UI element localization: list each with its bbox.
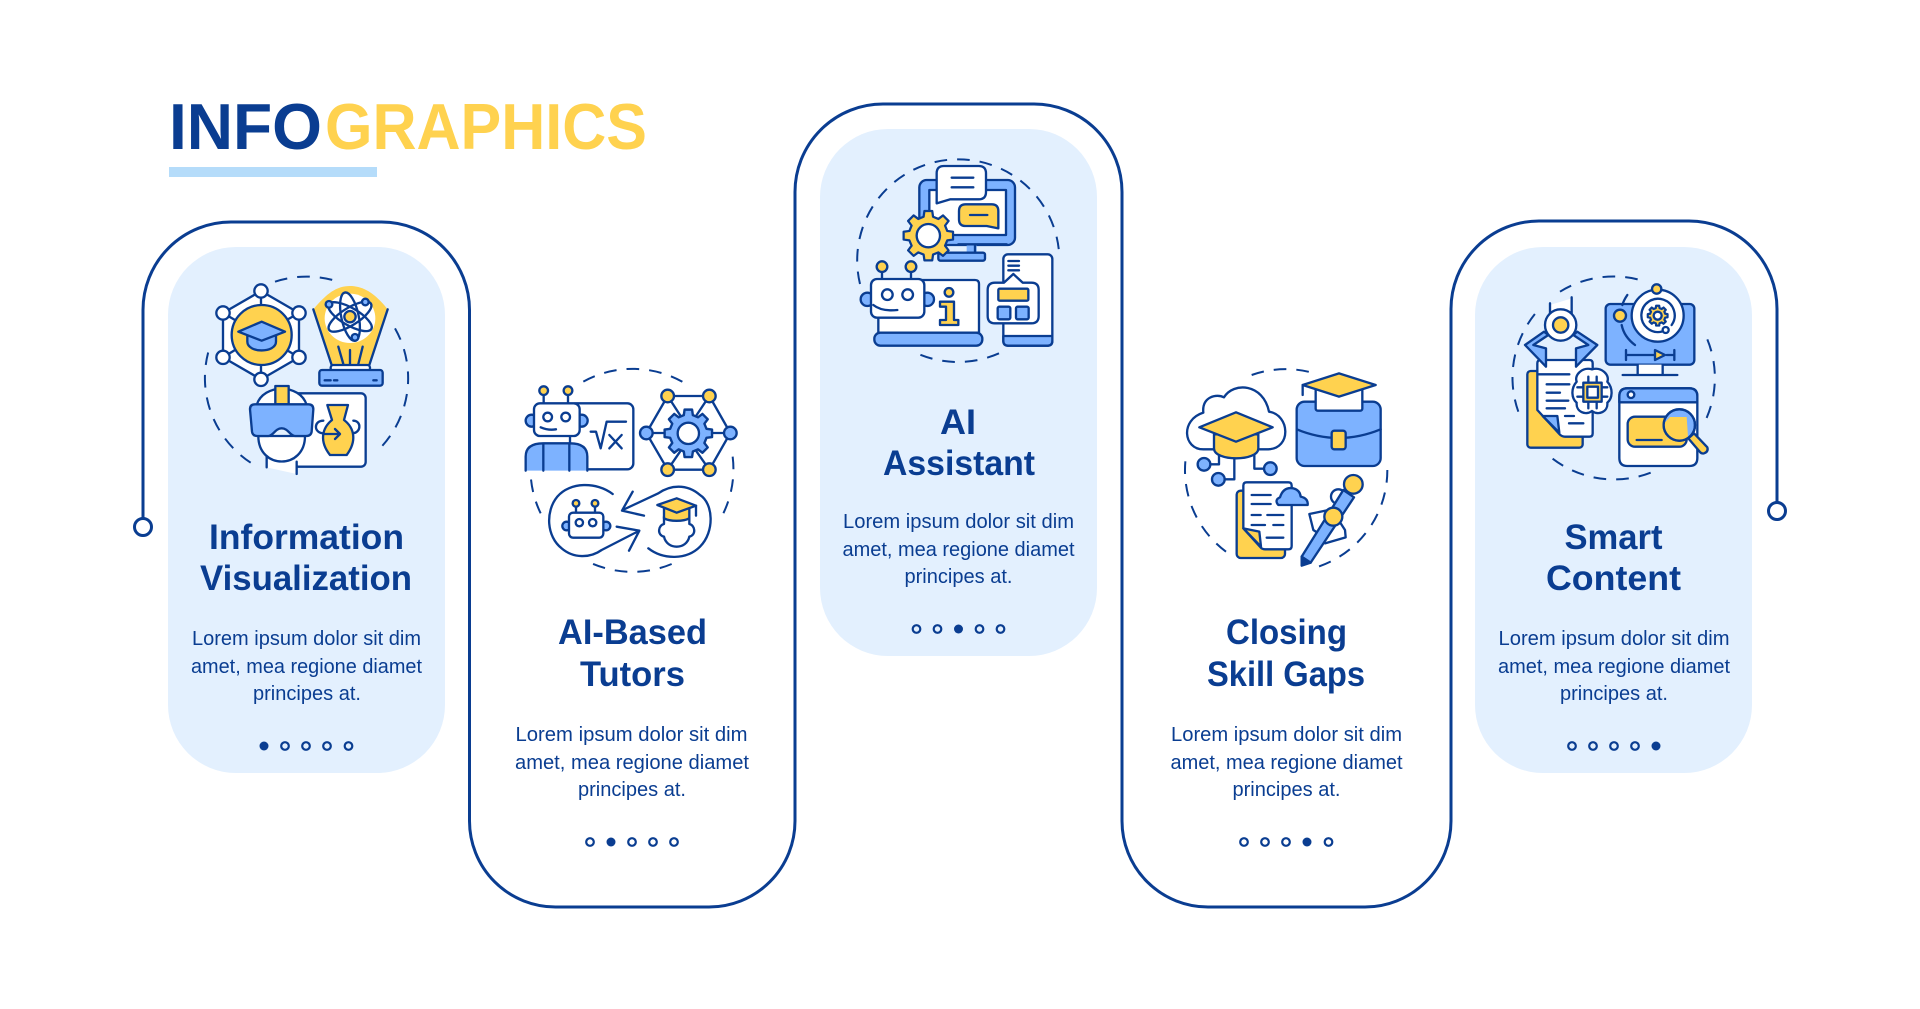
left end node — [134, 518, 152, 536]
icon: information visualization — [205, 277, 408, 474]
heading: Closing Skill Gaps: Skill Gaps — [1207, 655, 1365, 694]
heading: AI Assistant — [883, 403, 1035, 483]
text block: panel 1: principes at. — [253, 683, 361, 705]
title: INFO — [169, 90, 322, 163]
icon: smart content — [1512, 276, 1715, 479]
text block: panel 4 — [1170, 724, 1403, 801]
text block: panel 5: amet, mea regione diamet — [1498, 656, 1730, 678]
icon: AI assistant — [857, 159, 1059, 362]
icon: AI-based tutors — [526, 369, 737, 572]
heading: Information Visualization: Visualization — [200, 559, 412, 598]
heading: AI Assistant: AI — [940, 403, 976, 442]
text block: panel 3 — [842, 511, 1075, 588]
text block: panel 2 — [515, 724, 749, 801]
heading: Closing Skill Gaps — [1207, 613, 1365, 694]
text block: panel 5 — [1498, 628, 1730, 705]
heading: AI Assistant: Assistant — [883, 444, 1035, 483]
panel background: AI Assistant — [820, 129, 1097, 656]
text block: panel 2: Lorem ipsum dolor sit dim — [516, 724, 748, 746]
text block: panel 4: amet, mea regione diamet — [1170, 752, 1403, 774]
pagination dots: panel 1 — [260, 742, 352, 750]
text block: panel 4: principes at. — [1232, 779, 1340, 801]
heading: Information Visualization: Information — [209, 518, 404, 557]
text block: panel 2: principes at. — [578, 779, 686, 801]
text block: panel 1: amet, mea regione diamet — [191, 656, 422, 678]
text block: panel 1: Lorem ipsum dolor sit dim — [192, 628, 421, 650]
heading: Information Visualization — [200, 518, 412, 598]
title underline — [169, 167, 377, 177]
text block: panel 3: Lorem ipsum dolor sit dim — [843, 511, 1074, 533]
icon: closing skill gaps — [1185, 369, 1387, 567]
heading: Smart Content: Content — [1546, 559, 1681, 598]
text block: panel 1 — [191, 628, 422, 705]
text block: panel 3: amet, mea regione diamet — [842, 539, 1075, 561]
text block: panel 5: principes at. — [1560, 683, 1668, 705]
text block: panel 3: principes at. — [904, 566, 1012, 588]
pagination dots: panel 4 — [1240, 838, 1332, 846]
title: GRAPHICS — [325, 90, 647, 163]
pagination dots: panel 2 — [586, 838, 678, 846]
heading: AI-Based Tutors — [558, 613, 707, 694]
text block: panel 4: Lorem ipsum dolor sit dim — [1171, 724, 1402, 746]
heading: Closing Skill Gaps: Closing — [1226, 613, 1347, 652]
heading: Smart Content — [1546, 518, 1681, 598]
heading: AI-Based Tutors: AI-Based — [558, 613, 707, 652]
text block: panel 5: Lorem ipsum dolor sit dim — [1498, 628, 1730, 650]
heading: Smart Content: Smart — [1564, 518, 1663, 557]
right end node — [1768, 502, 1786, 520]
heading: AI-Based Tutors: Tutors — [580, 655, 685, 694]
serpentine outline connecting all panels — [143, 104, 1777, 907]
text block: panel 2: amet, mea regione diamet — [515, 752, 749, 774]
pagination dots: panel 5 — [1568, 742, 1660, 750]
title — [169, 90, 647, 163]
pagination dots: panel 3 — [913, 624, 1004, 634]
panel background: Information Visualization — [168, 247, 445, 773]
panel background: Smart Content — [1475, 247, 1752, 773]
